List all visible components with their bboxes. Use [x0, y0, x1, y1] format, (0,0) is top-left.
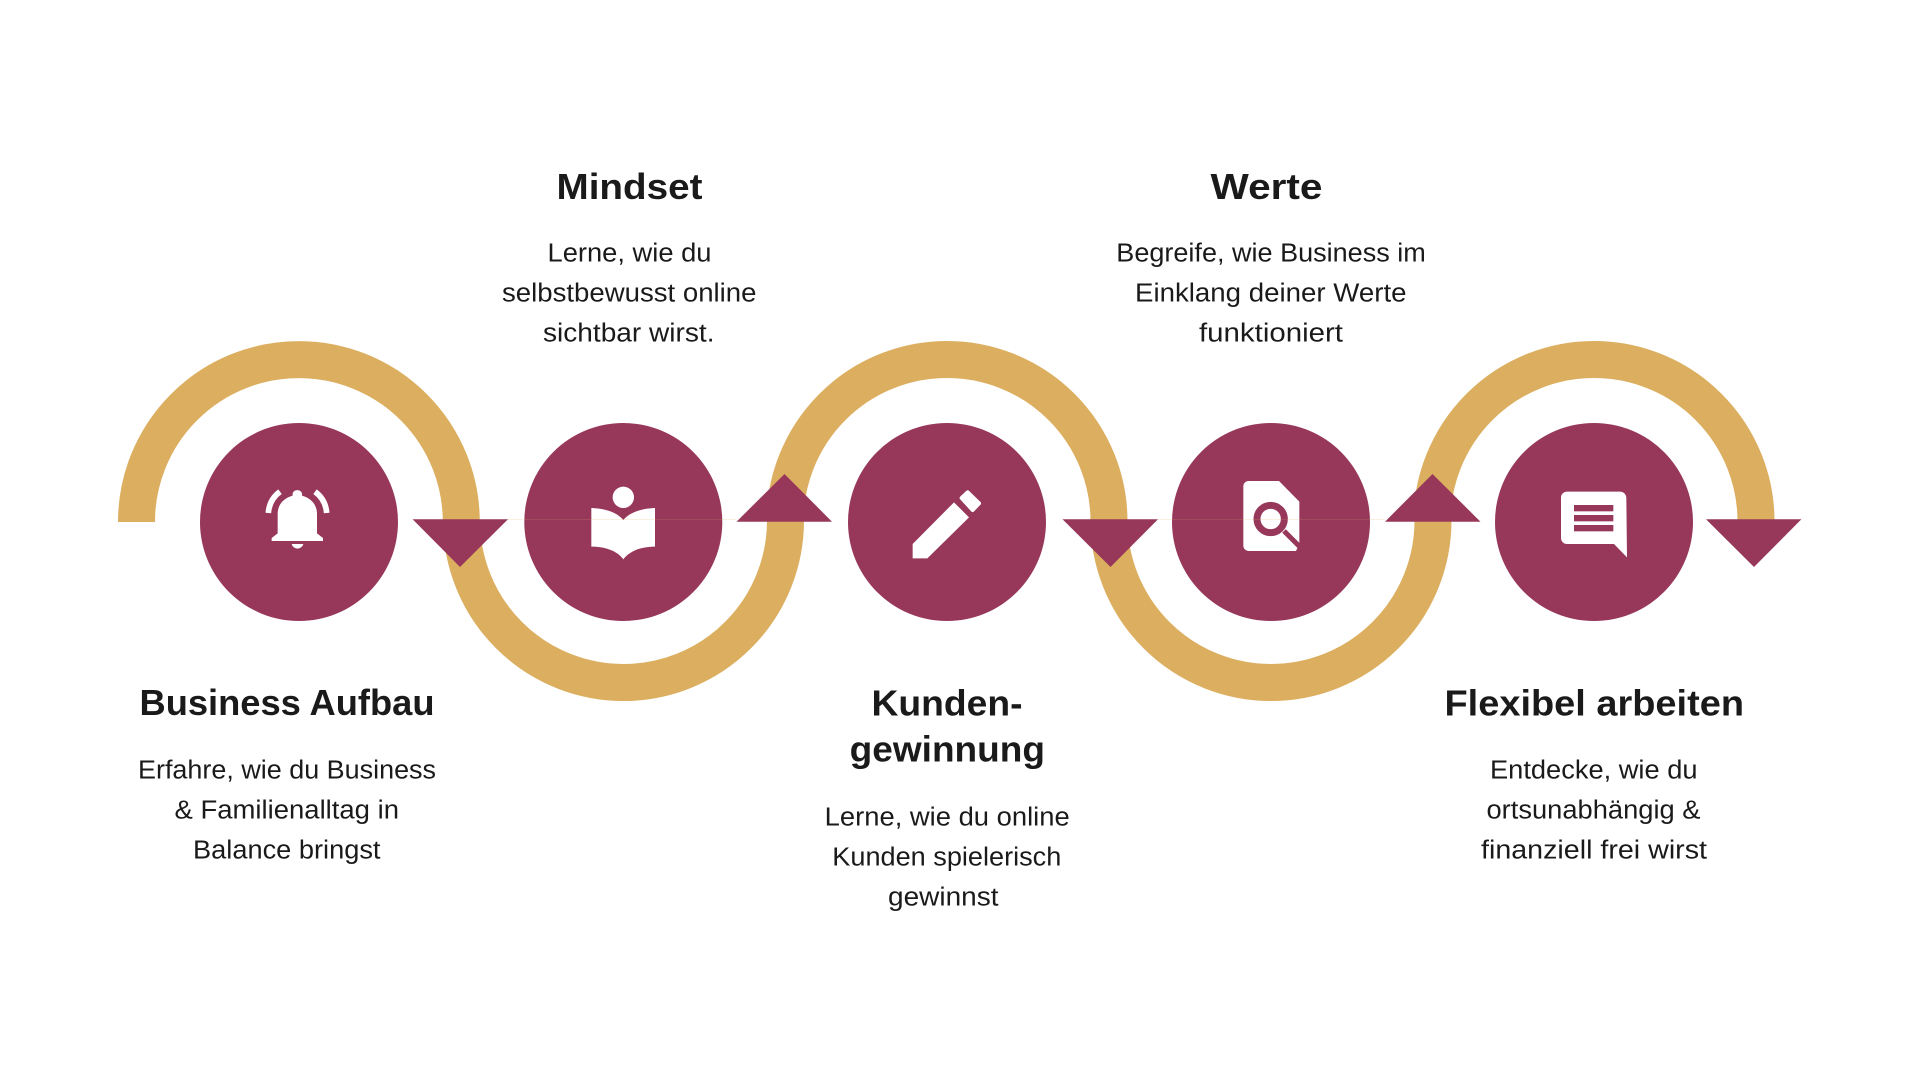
body: Werte: Einklang deiner Werte [1135, 280, 1406, 308]
body: Mindset: sichtbar wirst. [543, 320, 714, 348]
text block: Business Aufbau [138, 682, 436, 864]
body: Mindset [502, 240, 756, 348]
arrow 4 up [1385, 474, 1480, 522]
text block: Werte [1116, 166, 1426, 348]
body: Flexibel arbeiten [1481, 756, 1707, 864]
circle 5 with speech bubble icon [1495, 423, 1693, 621]
text block: Flexibel arbeiten [1444, 683, 1744, 864]
arc 4 [1109, 520, 1433, 682]
heading: Kundengewinnung: gewinnung [850, 729, 1045, 770]
body: Business Aufbau: Balance bringst [193, 836, 380, 864]
circle 1 with bell icon [200, 423, 398, 621]
body: Werte: Begreife, wie Business im [1116, 240, 1426, 268]
body: Business Aufbau [138, 756, 436, 864]
winding path [136, 360, 1756, 682]
icon: speech bubble [1561, 492, 1627, 557]
heading: Werte: Werte [1210, 166, 1322, 207]
body: Werte [1116, 240, 1426, 348]
body: Kundengewinnung: Kunden spielerisch [832, 844, 1061, 872]
body: Mindset: Lerne, wie du [548, 240, 712, 268]
body: Business Aufbau: & Familienalltag in [174, 796, 399, 824]
arrow 5 down [1706, 519, 1801, 567]
body: Kundengewinnung [825, 804, 1070, 912]
heading: Kundengewinnung: Kunden- [872, 683, 1022, 724]
heading: Kundengewinnung [850, 683, 1045, 770]
body: Werte: funktioniert [1199, 320, 1343, 348]
body: Business Aufbau: Erfahre, wie du Business [138, 756, 436, 784]
arc 3 [785, 360, 1109, 522]
body: Kundengewinnung: gewinnst [888, 884, 998, 912]
body: Mindset: selbstbewusst online [502, 280, 756, 308]
icon: bell [268, 490, 327, 549]
icon: pencil [913, 492, 979, 558]
arc 1 [136, 360, 461, 522]
arrow 3 down [1062, 519, 1158, 567]
text block: Mindset [502, 166, 756, 348]
body: Kundengewinnung: Lerne, wie du online [825, 804, 1070, 832]
circle 4 with document search icon [1172, 423, 1370, 621]
body: Flexibel arbeiten: Entdecke, wie du [1490, 756, 1698, 784]
icon: reader with open book [591, 487, 655, 559]
heading: Mindset: Mindset [556, 166, 702, 207]
arrow 2 up [736, 474, 832, 522]
circle 2 with book icon [524, 423, 722, 621]
text block: Kundengewinnung [825, 683, 1070, 912]
icon: document with magnifier [1243, 481, 1305, 552]
arc 5 [1432, 360, 1756, 522]
arrow 1 down [413, 519, 508, 567]
circle 3 with pencil icon [848, 423, 1046, 621]
body: Flexibel arbeiten: finanziell frei wirst [1481, 836, 1707, 864]
body: Flexibel arbeiten: ortsunabhängig & [1486, 796, 1700, 824]
heading: Flexibel arbeiten: Flexibel arbeiten [1444, 683, 1744, 724]
arc 2 [462, 520, 786, 682]
heading: Business Aufbau: Business Aufbau [140, 682, 434, 723]
